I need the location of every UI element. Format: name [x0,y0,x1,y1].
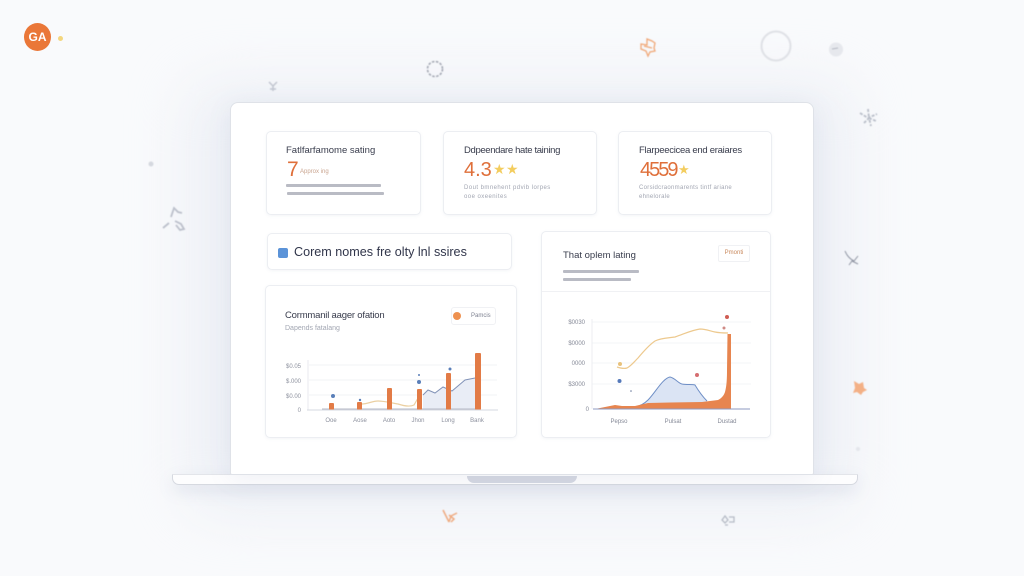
stat 3 star: ★ [678,162,690,177]
right chart title: That oplem lating [563,250,636,261]
icon: dark twig right [845,251,858,265]
icon: gear outline [428,62,442,76]
right y labels: 0000 [572,361,586,367]
stat 2 heading: Ddpeendare hate taining [464,145,560,156]
legend label: Pamcis [471,313,491,319]
stat 2 value: 4.3 [464,159,492,181]
right y labels: $3000 [568,382,586,388]
right x labels: Pepso [610,419,628,425]
stat 2 description: Dout bmnehent pdvib lorpes [464,185,551,191]
stat 1 line two [287,192,384,195]
left area series [423,378,475,410]
left yellow line [362,397,419,406]
icon: orange leaf right [853,381,867,395]
icon: small grey disc [829,42,843,56]
panel: stat card 3 [618,131,772,215]
left markers [331,368,452,401]
stat 3 description: ehnelorale [639,194,670,200]
left x labels [325,418,485,424]
logo badge: GA [28,30,46,44]
legend dot [453,312,461,320]
orange area series [595,334,731,409]
panel: stat card 2 [443,131,597,215]
stat 2 description: ooe oxeenites [464,194,507,200]
stat 2 description [464,184,551,200]
right chart line two [563,278,631,280]
right y labels [568,320,590,413]
right y labels: $0000 [568,341,586,347]
icon: grey sprig bottom [722,516,734,525]
right chart button [718,245,750,262]
left chart plot [286,353,498,424]
left y labels: $0.05 [286,364,302,370]
stat 1 line one [286,184,381,187]
laptop base [172,474,858,485]
stat 1 value: 7 [287,158,299,181]
icon: grey flower right [860,109,877,126]
icon: grey sprig left [269,82,277,91]
blue area series [635,377,707,409]
stat 1 unit: Approx ing [300,169,329,175]
right y labels: $0030 [568,320,586,326]
left y labels: $.000 [286,379,302,385]
logo badge [24,23,51,51]
panel: left chart [265,285,517,438]
panel: stat card 1 [266,131,421,215]
chart markers [618,315,729,392]
stat 3 value: 4559 [640,159,676,181]
background glow [190,85,850,510]
left bars [329,353,481,410]
icon: grey cluster left [163,208,184,230]
right y labels: 0 [586,407,590,413]
left chart title: Cormmanil aager ofation [285,310,384,321]
panel: right chart [541,231,771,438]
right chart button: Pmonti [725,250,743,256]
left y labels: $0.00 [286,394,302,400]
icon: ring [762,32,790,60]
yellow line [617,329,728,368]
left x labels: Ooe [325,418,337,424]
icon: orange leaf bottom [443,510,457,522]
left chart legend [451,307,496,325]
stat 3 heading: Flarpeecicea end eraiares [639,145,742,156]
left y labels: 0 [298,408,302,414]
laptop notch [467,476,577,483]
icon: tiny bead [148,162,154,166]
stat 1 heading: Fatlfarfamome sating [286,145,375,156]
left x labels: Jhon [411,418,425,424]
left x labels: Bank [470,418,485,424]
laptop screen [230,102,814,475]
left x labels: Aoto [383,418,396,424]
stat 2 stars: ★★ [493,161,519,177]
panel: section banner [267,233,512,270]
left x labels: Aose [353,418,367,424]
right chart divider [542,291,770,292]
icon: orange leaf top [641,39,655,56]
right x labels: Dustad [717,419,737,425]
banner icon [278,248,288,258]
stat 3 description [639,184,732,200]
left x labels: Long [441,418,455,424]
icon: tiny dot right [856,447,860,451]
right x labels: Pulsat [665,419,682,425]
baseline [593,408,750,410]
left y labels [286,364,302,414]
stat 3 description: Corsidcraonmarents tintf ariane [639,185,732,191]
right chart plot [568,315,751,425]
left chart subtitle: Dapends fatalang [285,325,340,332]
right chart line one [563,270,639,272]
banner title: Corem nomes fre olty lnl ssires [294,245,467,259]
logo dot [58,36,63,41]
right x labels [610,419,737,425]
